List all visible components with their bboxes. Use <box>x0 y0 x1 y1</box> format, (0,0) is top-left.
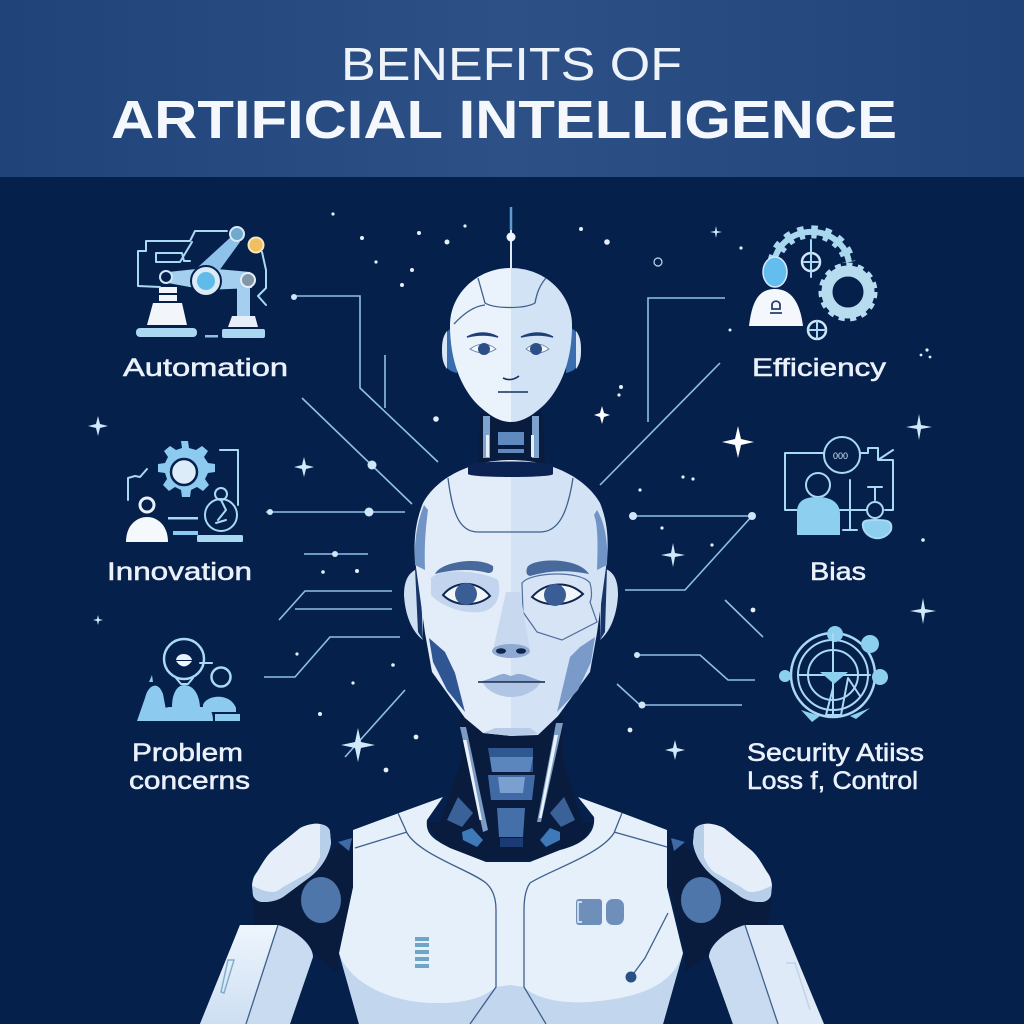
label: bias: Bias <box>810 558 866 586</box>
antenna <box>506 207 516 268</box>
right eye <box>532 584 583 606</box>
left eye <box>443 583 490 605</box>
label: problem concerns: Problem <box>132 739 243 767</box>
label: automation: Automation <box>123 354 288 382</box>
small face <box>450 268 511 422</box>
cheek panels <box>429 638 465 712</box>
header banner <box>0 0 1024 177</box>
large robot head <box>404 460 618 736</box>
robot torso <box>339 797 683 1024</box>
label: problem concerns <box>129 739 250 795</box>
icon: people and monitor (bias): 000 <box>833 451 848 461</box>
label: innovation: Innovation <box>107 558 252 586</box>
eye panels <box>431 571 499 612</box>
icon: people and monitor (bias) <box>785 437 893 538</box>
chest seams <box>355 813 667 1024</box>
title line 1: BENEFITS OF <box>341 38 682 90</box>
title line 2: ARTIFICIAL INTELLIGENCE <box>111 90 897 150</box>
left arm <box>200 824 353 1024</box>
icon: security radar <box>779 626 888 722</box>
small nose and mouth <box>498 376 528 392</box>
small ears <box>442 327 457 373</box>
head side panels <box>415 505 428 570</box>
chest vents <box>415 937 429 968</box>
small neck <box>478 413 545 466</box>
icon: robotic arm (automation) <box>136 227 266 338</box>
left shoulder pad <box>252 824 331 902</box>
label: security risks <box>747 739 924 795</box>
label: problem concerns: concerns <box>129 767 250 795</box>
chest badge <box>576 899 624 925</box>
nose <box>493 592 530 655</box>
small eyes <box>467 333 553 355</box>
label: security risks: Loss f, Control <box>747 767 918 795</box>
label: security risks: Security Atiiss <box>747 739 924 767</box>
icon: person with gears (efficiency) <box>749 232 875 339</box>
forehead seam <box>448 478 573 532</box>
star field <box>295 212 931 772</box>
icon: gear and person (innovation) <box>126 441 243 542</box>
chest button <box>626 913 668 982</box>
small robot head <box>442 268 581 466</box>
circuit connector lines <box>264 294 763 757</box>
sparkle stars <box>88 226 936 762</box>
big neck <box>427 715 594 860</box>
head top slot <box>468 462 553 477</box>
torso lower shading <box>339 953 683 1024</box>
brows <box>435 561 493 574</box>
large ears <box>404 567 423 640</box>
mouth <box>478 674 545 697</box>
large face <box>415 460 511 736</box>
icon: person with lightbulb (problem solving) <box>137 639 240 721</box>
right arm <box>670 824 824 1024</box>
right shoulder pad <box>693 824 772 902</box>
chin shade <box>483 728 538 736</box>
label: efficiency: Efficiency <box>752 354 887 382</box>
